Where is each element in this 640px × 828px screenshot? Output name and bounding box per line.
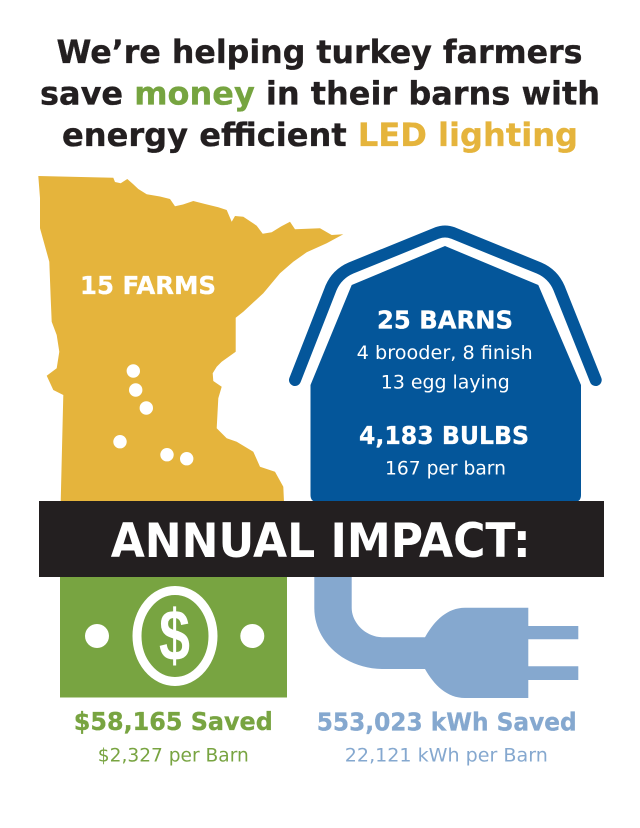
title [40, 33, 600, 154]
title: energy efficient LED lighting [62, 116, 578, 154]
map: Minnesota [38, 176, 343, 502]
barn: 13 egg laying [381, 371, 510, 393]
energy saved [317, 708, 577, 766]
title: We’re helping turkey farmers [56, 33, 582, 71]
bulb count: 4,183 BULBS [359, 421, 529, 450]
barn [295, 232, 596, 502]
money saved: $58,165 Saved [74, 707, 273, 736]
banner: annual impact: ANNUAL IMPACT: [111, 514, 531, 569]
money saved [74, 707, 273, 766]
barn count: 25 BARNS [377, 305, 513, 334]
title: save money in their barns with [40, 74, 600, 112]
map label: 15 FARMS [80, 271, 216, 300]
icon: electric plug [314, 577, 578, 698]
icon: dollar bill [60, 577, 287, 698]
money saved: $2,327 per Barn [98, 744, 249, 766]
bulbs per barn: 167 per barn [385, 458, 506, 480]
energy saved: 22,121 kWh per Barn [345, 744, 548, 766]
farm location dots [113, 364, 193, 465]
icon: dollar bill: $ [159, 596, 190, 676]
barn types: 4 brooder, 8 finish [357, 342, 533, 364]
energy saved: 553,023 kWh Saved [317, 708, 577, 736]
banner: annual impact [39, 501, 604, 577]
